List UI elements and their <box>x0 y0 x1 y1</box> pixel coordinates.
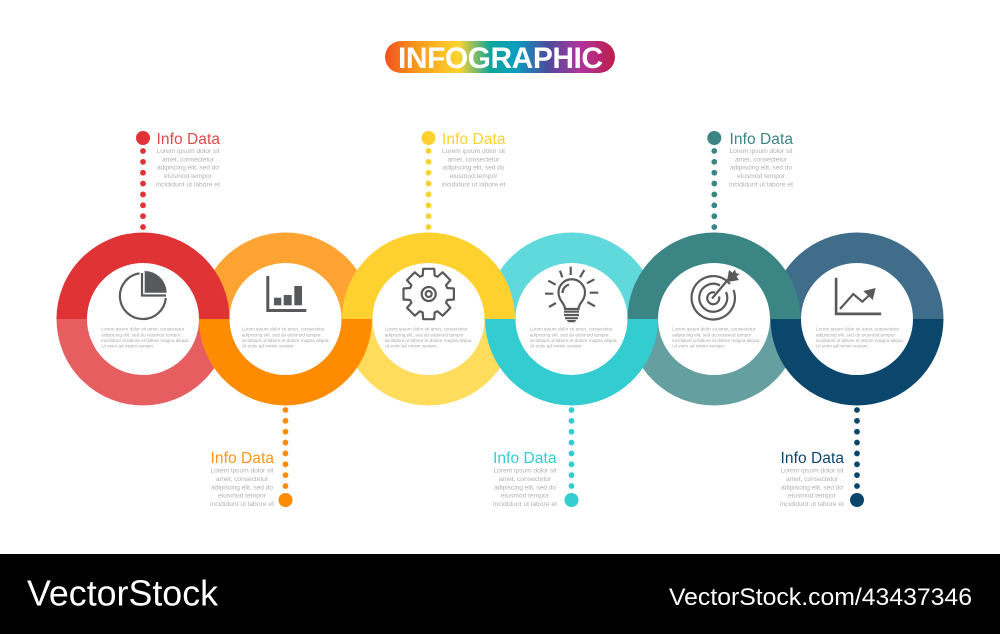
ring 5 bottom half: grey teal <box>643 319 785 390</box>
text: circle 4 body: incididunt ut labore et dolore magna aliqua. <box>530 338 618 343</box>
step 3 callout: yellow: incididunt ut labore et <box>442 181 506 188</box>
step 6 callout: navy: eiusmod tempor <box>788 493 837 500</box>
text: circle 1 body <box>101 327 189 349</box>
step 4 callout: teal: adipiscing elit, sed do <box>494 484 556 491</box>
icon: light bulb <box>545 267 598 322</box>
text: circle 5 body: Ut enim ad minim veniam. <box>672 344 725 349</box>
text: circle 1 body: incididunt ut labore et dolore magna aliqua. <box>101 338 189 343</box>
step 1 callout: red: Info Data <box>156 131 220 148</box>
text: circle 2 body: incididunt ut labore et dolore magna aliqua. <box>242 338 330 343</box>
icon: target with arrow <box>692 270 740 319</box>
text: circle 2 body: Ut enim ad minim veniam. <box>242 344 295 349</box>
ring 3 top half: yellow <box>357 248 500 319</box>
step 5 callout: dark teal: incididunt ut labore et <box>729 181 793 188</box>
footer watermark band <box>0 554 1000 634</box>
step 4 callout: teal: Lorem ipsum dolor sit <box>494 468 557 474</box>
footer watermark band: VectorStock <box>27 572 219 614</box>
text: circle 2 body <box>242 327 330 349</box>
step 5 callout: dark teal: Lorem ipsum dolor sit <box>730 148 793 155</box>
ring 1 top half: red <box>72 248 214 319</box>
text: circle 2 body: Lorem ipsum dolor sit amet, consectetur <box>242 327 325 332</box>
ring 4 top half: light teal <box>500 248 643 319</box>
ring 1 bottom half: light red <box>72 319 214 390</box>
step 5 callout: dark teal: adipiscing elit, sed do <box>730 165 792 172</box>
step 4 callout: teal <box>493 410 578 508</box>
step 5 callout: dark teal: eiusmod tempor <box>737 173 786 180</box>
step 6 callout: navy <box>780 410 864 508</box>
text: circle 5 body: Lorem ipsum dolor sit amet, consectetur <box>672 327 756 332</box>
step 6 callout: navy: incididunt ut labore et <box>780 501 844 508</box>
step 5 callout: dark teal: amet, consectetur <box>735 156 788 163</box>
step 6 callout: navy: Info Data <box>780 450 844 467</box>
step 4 callout: teal: Info Data <box>493 450 557 467</box>
text: circle 3 body: Lorem ipsum dolor sit amet, consectetur <box>385 327 468 332</box>
step 3 callout: yellow <box>422 131 506 228</box>
text: circle 3 body <box>385 327 473 349</box>
step 1 callout: red: amet, consectetur <box>162 156 215 163</box>
icon: growth chart <box>835 278 881 315</box>
text: circle 4 body: adipiscing elit, sed do eiusmod tempor <box>530 332 609 337</box>
step 3 callout: yellow: Info Data <box>442 131 506 148</box>
icon: pie chart <box>120 271 167 319</box>
step 1 callout: red: Lorem ipsum dolor sit <box>156 148 220 155</box>
text: circle 6 body: Ut enim ad minim veniam. <box>816 344 869 349</box>
icon: bar chart <box>266 276 306 312</box>
step 6 callout: navy: adipiscing elit, sed do <box>781 484 843 491</box>
step 1 callout: red: adipiscing elit, sed do <box>157 165 219 172</box>
ring 6 bottom half: navy <box>786 319 928 390</box>
step 2 callout: orange: amet, consectetur <box>216 476 269 483</box>
text: circle 6 body: incididunt ut labore et dolore magna aliqua. <box>816 338 904 343</box>
text: circle 3 body: Ut enim ad minim veniam. <box>385 344 438 349</box>
text: circle 4 body: Ut enim ad minim veniam. <box>530 344 583 349</box>
text: circle 2 body: adipiscing elit, sed do eiusmod tempor <box>242 332 321 337</box>
icon: gear <box>404 269 454 319</box>
ring 2 top half: orange <box>214 248 357 319</box>
step 2 callout: orange: incididunt ut labore et <box>210 501 274 508</box>
step 2 callout: orange: adipiscing elit, sed do <box>211 484 273 491</box>
step 6 callout: navy: Lorem ipsum dolor sit <box>780 468 844 474</box>
step 6 callout: navy: amet, consectetur <box>786 476 839 483</box>
text: circle 6 body: Lorem ipsum dolor sit amet, consectetur <box>816 327 899 332</box>
step 5 callout: dark teal <box>707 131 793 228</box>
step 2 callout: orange <box>210 410 292 508</box>
step 3 callout: yellow: adipiscing elit, sed do <box>442 165 505 172</box>
text: circle 4 body <box>530 327 618 349</box>
step 3 callout: yellow: amet, consectetur <box>448 156 500 163</box>
step 1 callout: red <box>136 131 220 228</box>
step 4 callout: teal: eiusmod tempor <box>501 493 550 500</box>
text: circle 1 body: Ut enim ad minim veniam. <box>101 344 154 349</box>
ring 3 bottom half: light yellow <box>357 319 500 390</box>
step 3 callout: yellow: Lorem ipsum dolor sit <box>442 148 505 155</box>
step 4 callout: teal: incididunt ut labore et <box>493 501 557 508</box>
text: circle 1 body: Lorem ipsum dolor sit amet, consectetur <box>101 327 185 332</box>
step 4 callout: teal: amet, consectetur <box>499 476 552 483</box>
title pill: INFOGRAPHIC <box>398 42 603 75</box>
text: circle 1 body: adipiscing elit, sed do eiusmod tempor <box>101 332 181 337</box>
step 5 callout: dark teal: Info Data <box>730 131 793 148</box>
text: circle 6 body <box>816 327 904 349</box>
text: circle 5 body: incididunt ut labore et dolore magna aliqua. <box>672 338 760 343</box>
text: circle 3 body: adipiscing elit, sed do eiusmod tempor <box>385 332 464 337</box>
ring 6 top half: slate blue <box>786 248 928 319</box>
interlocking ring chain <box>72 248 928 390</box>
ring 5 top half: dark teal <box>643 248 785 319</box>
step 2 callout: orange: Info Data <box>210 450 274 467</box>
ring 2 bottom half: orange <box>214 319 357 390</box>
step 3 callout: yellow: eiusmod tempor <box>450 173 498 180</box>
text: circle 5 body <box>672 327 760 349</box>
step 1 callout: red: incididunt ut labore et <box>156 181 220 188</box>
text: circle 6 body: adipiscing elit, sed do eiusmod tempor <box>816 332 895 337</box>
step 2 callout: orange: eiusmod tempor <box>218 493 267 500</box>
step 1 callout: red: eiusmod tempor <box>164 173 213 180</box>
ring 4 bottom half: teal <box>500 319 643 390</box>
footer watermark band: VectorStock.com/43437346 <box>669 584 972 611</box>
text: circle 4 body: Lorem ipsum dolor sit amet, consectetur <box>530 327 613 332</box>
step 2 callout: orange: Lorem ipsum dolor sit <box>210 468 274 474</box>
text: circle 5 body: adipiscing elit, sed do eiusmod tempor <box>672 332 752 337</box>
text: circle 3 body: incididunt ut labore et dolore magna aliqua. <box>385 338 473 343</box>
